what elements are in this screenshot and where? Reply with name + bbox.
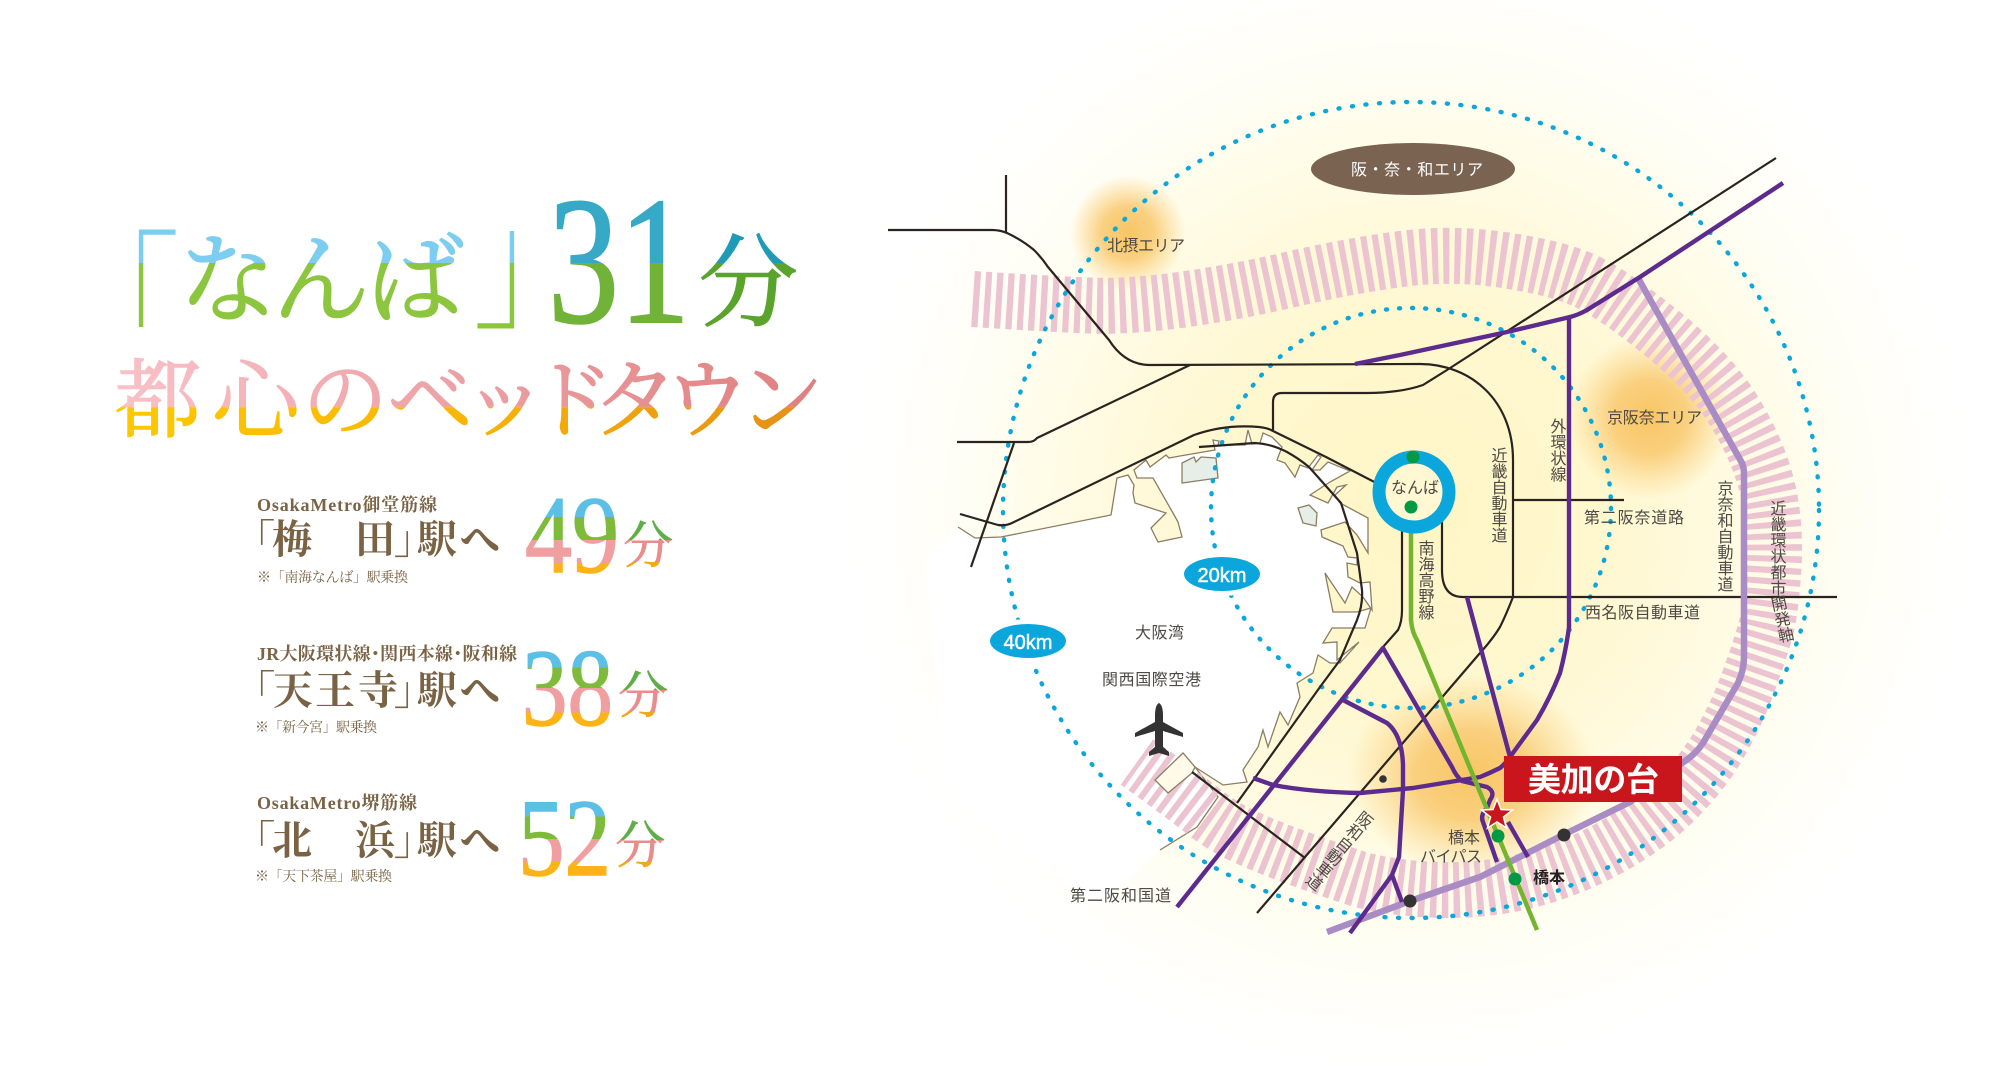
map labels: 第二阪和国道 (1070, 887, 1171, 905)
title: 「なんば」31分: 31 (548, 161, 690, 362)
map labels: 近畿環状都市 (1768, 500, 1786, 596)
harbour islands (1182, 457, 1317, 526)
map labels: 南海高野線 (1416, 540, 1434, 620)
20km label (1184, 557, 1260, 591)
icon: airplane (1135, 703, 1183, 756)
purple national roads (1177, 183, 1783, 933)
area glow: 京阪奈 (1568, 335, 1732, 499)
40km label (990, 624, 1066, 658)
map labels: 外環状線 (1548, 418, 1566, 482)
title: 「なんば」31分: 分 (698, 203, 798, 347)
route row: 北浜: 52 (518, 777, 611, 899)
title: 「なんば」31分 (60, 143, 798, 399)
map labels: 橋本 (1533, 868, 1565, 887)
map labels: 橋本 (1448, 829, 1480, 847)
namba station ring (1379, 450, 1449, 527)
Osaka bay water (925, 430, 1372, 905)
icon: star (1482, 799, 1512, 828)
map labels: 西名阪自動車道 (1585, 604, 1700, 622)
green Nankai Koya line (1411, 507, 1537, 930)
route row: 天王寺 (235, 627, 668, 749)
map labels: 第二阪奈道路 (1584, 509, 1684, 527)
namba station ring: なんば (1391, 479, 1439, 497)
map labels: 北摂エリア (1107, 237, 1185, 255)
route row: 北浜: ※「天下茶屋」駅乗換 (255, 866, 392, 886)
route row: 天王寺: 「天王寺」駅へ (235, 659, 500, 716)
light purple ring road (1327, 278, 1744, 932)
Kansai airport island (1155, 753, 1195, 793)
title: 「なんば」31分: 「 (60, 183, 180, 399)
40km label: 40km (1004, 632, 1052, 654)
green stations (1492, 830, 1522, 886)
route row: 北浜: 分 (615, 806, 665, 878)
callout: 美加の台 (1504, 756, 1682, 802)
title: 「なんば」31分: なんば (179, 202, 464, 343)
map labels: 近畿自動車道 (1488, 447, 1508, 543)
route row: 梅田: OsakaMetro御堂筋線 (257, 494, 437, 515)
map labels: 開発軸 (1767, 594, 1795, 645)
callout: 美加の台: 美加の台 (1528, 761, 1659, 798)
route row: 天王寺: 分 (618, 656, 668, 728)
route row: 梅田: ※「南海なんば」駅乗換 (257, 567, 408, 587)
map labels: バイパス (1420, 849, 1482, 866)
area pill: 阪・奈・和エリア (1311, 143, 1515, 195)
route row: 梅田: 分 (623, 506, 673, 578)
pink development band (973, 256, 1774, 890)
route row: 梅田 (235, 474, 673, 596)
route row: 北浜: 「北浜」駅へ (235, 809, 500, 866)
map labels: 大阪湾 (1135, 624, 1184, 642)
20km label: 20km (1198, 565, 1246, 587)
area glow: 美加の台 (1347, 675, 1597, 875)
route row: 天王寺: JR大阪環状線･関西本線･阪和線 (257, 643, 517, 664)
title: 「なんば」31分: 」 (473, 143, 593, 359)
route row: 梅田: 49 (525, 474, 619, 596)
subtitle: 都心のベッドタウン: 都心のベッドタウン (115, 331, 824, 455)
map background glow (850, 0, 2000, 1069)
map labels (1070, 237, 1795, 905)
map labels: 京奈和自動車道 (1714, 480, 1734, 592)
icon: junction dots (1379, 775, 1570, 908)
black expressways (888, 158, 1837, 913)
map labels: 阪和自動車道 (1301, 807, 1376, 893)
route row: 天王寺: ※「新今宮」駅乗換 (255, 717, 377, 737)
route row: 北浜: OsakaMetro堺筋線 (257, 792, 417, 813)
route row: 梅田: 「梅田」駅へ (235, 508, 500, 565)
area glow: 北摂 (1070, 175, 1186, 291)
route row: 北浜 (235, 777, 665, 899)
map labels: 京阪奈エリア (1607, 409, 1702, 427)
area pill: 阪・奈・和エリア: 阪・奈・和エリア (1351, 161, 1483, 179)
route row: 天王寺: 38 (522, 627, 613, 749)
map labels: 関西国際空港 (1102, 671, 1201, 689)
40km dotted ring (1003, 102, 1819, 918)
20km dotted ring (1211, 308, 1611, 708)
